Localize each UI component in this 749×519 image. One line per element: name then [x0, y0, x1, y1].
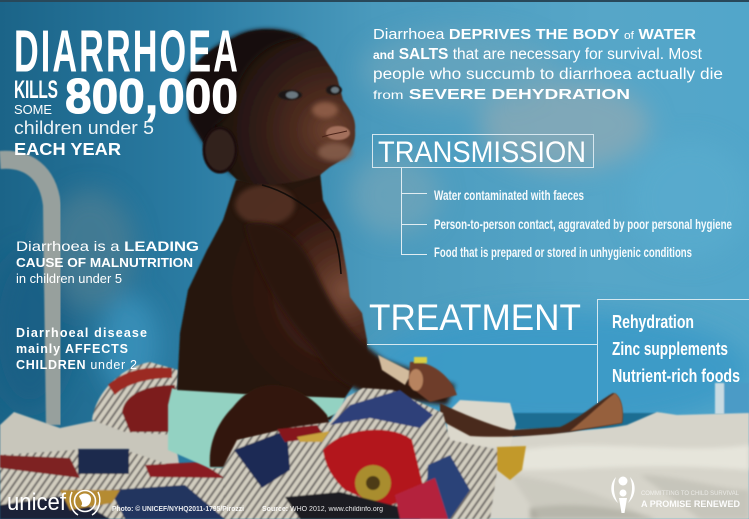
baby nose and mouth	[312, 102, 352, 161]
front quilt	[223, 388, 526, 519]
source: Source: WHO 2012, www.childinfo.org	[262, 506, 383, 513]
baby	[168, 29, 623, 468]
text block: deprives the body: people who succumb to diarrhoea actually die	[373, 66, 723, 83]
photo credit: Photo: © UNICEF/NYHQ2011-1795/Pirozzi	[112, 505, 244, 513]
logo: a promise renewed	[611, 476, 740, 513]
text block: mainly affects children: CHILDREN under 2	[16, 358, 137, 372]
baby hair	[187, 29, 305, 180]
transmission list	[402, 168, 732, 260]
transmission list: Water contaminated with faeces	[434, 188, 584, 203]
baby shoulder highlight	[235, 185, 295, 225]
logo: unicef	[7, 489, 100, 516]
heading: diarrhoea kills 800,000	[14, 19, 238, 159]
text block: mainly affects children: mainly AFFECTS	[16, 342, 128, 356]
baby head	[187, 30, 355, 185]
baby eyes	[278, 85, 342, 100]
heading: diarrhoea kills 800,000: EACH YEAR	[14, 139, 121, 159]
heading: diarrhoea kills 800,000: DIARRHOEA	[14, 19, 238, 85]
logo: a promise renewed: A PROMISE RENEWED	[641, 499, 740, 509]
treatment list	[612, 311, 740, 386]
text block: deprives the body: Diarrhoea DEPRIVES THE BODY of WATER	[373, 26, 696, 43]
heading: diarrhoea kills 800,000: 800,000	[65, 70, 238, 124]
heading: diarrhoea kills 800,000: SOME	[14, 103, 52, 117]
text block: leading cause of malnutrition: Diarrhoea is a LEADING	[16, 238, 199, 254]
text block: deprives the body	[373, 26, 723, 103]
background quilt	[0, 362, 230, 519]
treatment heading	[367, 297, 749, 403]
text block: mainly affects children	[16, 326, 147, 372]
text block: deprives the body: from SEVERE DEHYDRATION	[373, 86, 630, 103]
text block: deprives the body: and SALTS that are necessary for survival. Most	[373, 46, 703, 63]
baby body	[177, 172, 367, 420]
text block: leading cause of malnutrition: CAUSE OF MALNUTRITION	[16, 255, 193, 270]
text block: leading cause of malnutrition: in children under 5	[16, 272, 122, 286]
nappy	[168, 388, 345, 468]
baby arm	[245, 222, 455, 405]
transmission heading box: TRANSMISSION	[378, 136, 586, 169]
text block: leading cause of malnutrition	[16, 238, 199, 286]
icon: promise figures	[611, 476, 635, 513]
baby ear	[204, 128, 236, 172]
necklace	[262, 185, 341, 274]
logo: unicef: unicef	[7, 489, 66, 516]
bed sheets	[0, 400, 749, 519]
bed rail	[0, 160, 55, 425]
baby hand and bandage	[378, 355, 457, 402]
mug on the bedside	[715, 383, 749, 414]
heading: diarrhoea kills 800,000: children under 5	[14, 117, 154, 138]
treatment heading: TREATMENT	[369, 297, 581, 338]
lower leg and foot	[440, 393, 623, 437]
treatment list: Rehydration	[612, 311, 694, 332]
text block: mainly affects children: Diarrhoeal disease	[16, 326, 147, 340]
heading: diarrhoea kills 800,000: KILLS	[14, 76, 58, 104]
thigh	[210, 385, 330, 467]
logo: a promise renewed: COMMITTING TO CHILD SURVIVAL	[641, 490, 739, 497]
